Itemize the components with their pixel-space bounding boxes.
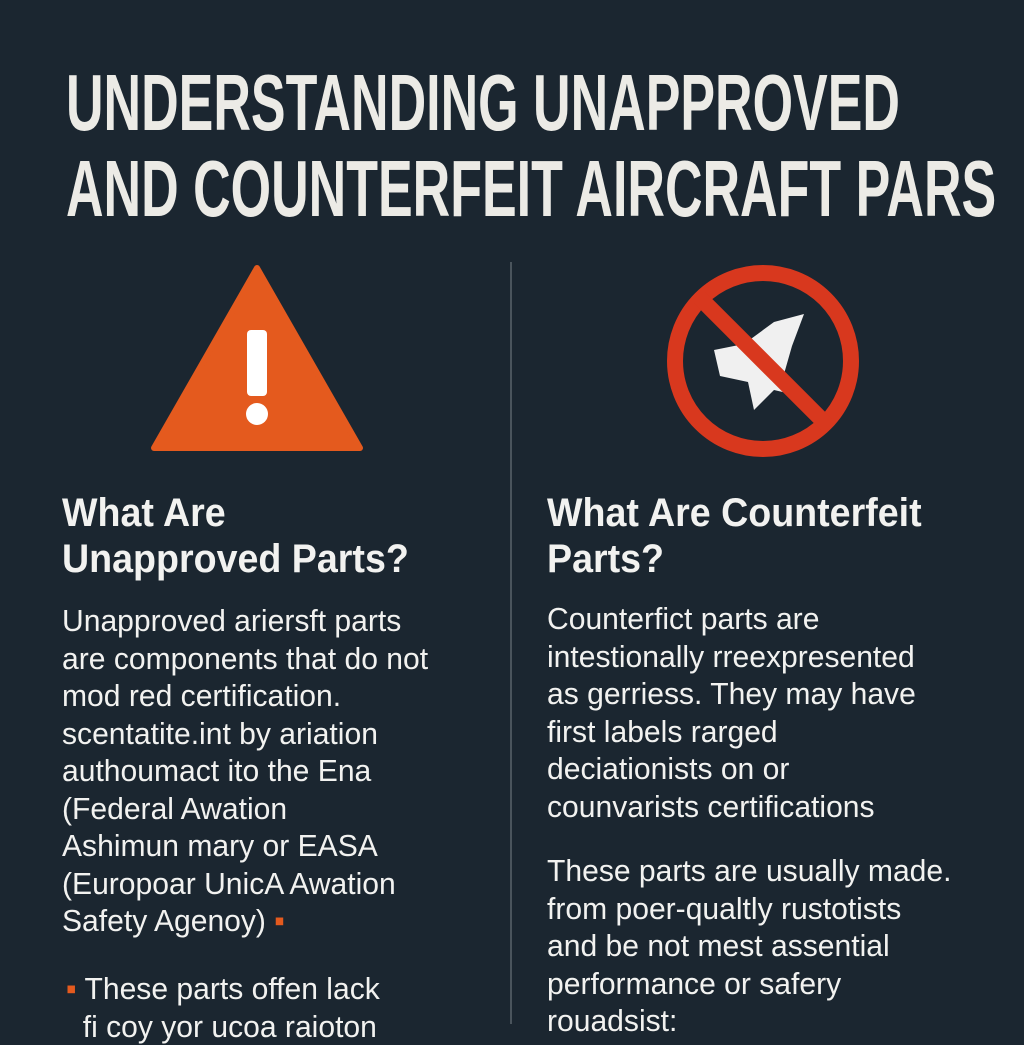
text block: counterfeit: counvarists certifications	[547, 788, 875, 824]
heading: unapproved: Unapproved Parts?	[62, 537, 409, 581]
title	[66, 58, 996, 233]
text block: quality: performance or safery	[547, 966, 841, 1000]
text block: counterfeit: deciationists on or	[547, 751, 789, 786]
bullet: fi coy yor ucoa raioton	[83, 1008, 377, 1044]
text block: quality	[547, 853, 951, 1038]
text block: counterfeit: first labels rarged	[547, 714, 778, 748]
icon: no aircraft	[667, 265, 859, 457]
text block: unapproved: Safety Agenoy) ▪	[62, 903, 285, 938]
divider	[510, 262, 512, 1024]
title: AND COUNTERFEIT AIRCRAFT PARS	[66, 144, 996, 233]
heading: unapproved: What Are	[62, 491, 226, 535]
text block: quality: These parts are usually made.	[547, 853, 951, 888]
text block: counterfeit: intestionally rreexpresented	[547, 638, 915, 674]
bullet	[66, 971, 380, 1044]
text block: quality: and be not mest assential	[547, 928, 890, 963]
title: UNDERSTANDING UNAPPROVED	[66, 58, 900, 147]
text block: unapproved: (Federal Awation	[62, 790, 287, 826]
text block: unapproved: authoumact ito the Ena	[62, 753, 371, 788]
text block: unapproved: Unapproved ariersft parts	[62, 603, 401, 638]
text block: counterfeit	[547, 601, 916, 824]
text block: unapproved: (Europoar UnicA Awation	[62, 866, 396, 900]
text block: quality: from poer-qualtly rustotists	[547, 890, 901, 926]
bullet: ▪ These parts offen lack	[66, 971, 380, 1006]
icon: warning triangle	[151, 265, 363, 451]
heading: counterfeit: Parts?	[547, 537, 664, 581]
text block: unapproved: are components that do not	[62, 640, 428, 676]
panel: unapproved	[62, 491, 428, 1044]
text block: unapproved: Ashimun mary or EASA	[62, 828, 378, 863]
heading: counterfeit	[547, 491, 922, 581]
text block: unapproved	[62, 603, 428, 938]
heading: counterfeit: What Are Counterfeit	[547, 491, 922, 535]
text block: unapproved: scentatite.int by ariation	[62, 716, 378, 750]
text block: quality: rouadsist:	[547, 1003, 677, 1038]
panel: counterfeit	[547, 491, 951, 1038]
text block: counterfeit: Counterfict parts are	[547, 601, 819, 636]
text block: counterfeit: as gerriess. They may have	[547, 676, 916, 711]
heading: unapproved	[62, 491, 409, 581]
text block: unapproved: mod red certification.	[62, 678, 341, 713]
